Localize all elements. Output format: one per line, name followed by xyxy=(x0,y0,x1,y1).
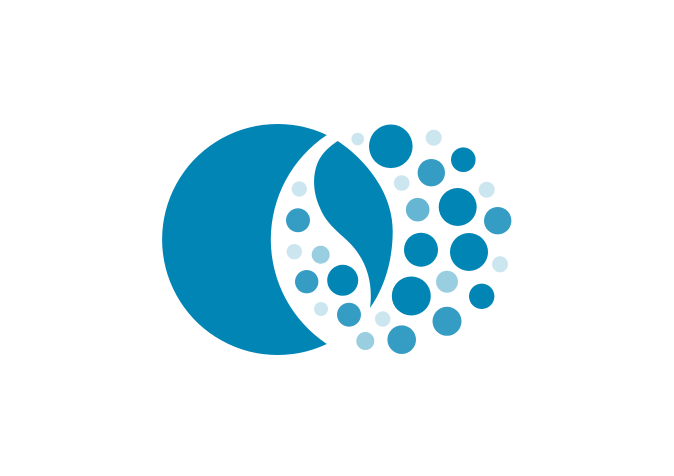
medium-light dot xyxy=(406,198,430,222)
medium dots xyxy=(286,159,511,354)
S-shaped wave xyxy=(314,141,393,308)
large crescent xyxy=(162,124,327,355)
lightest dots xyxy=(287,130,508,327)
pale blue dots xyxy=(312,246,458,350)
dark dots xyxy=(327,124,494,316)
